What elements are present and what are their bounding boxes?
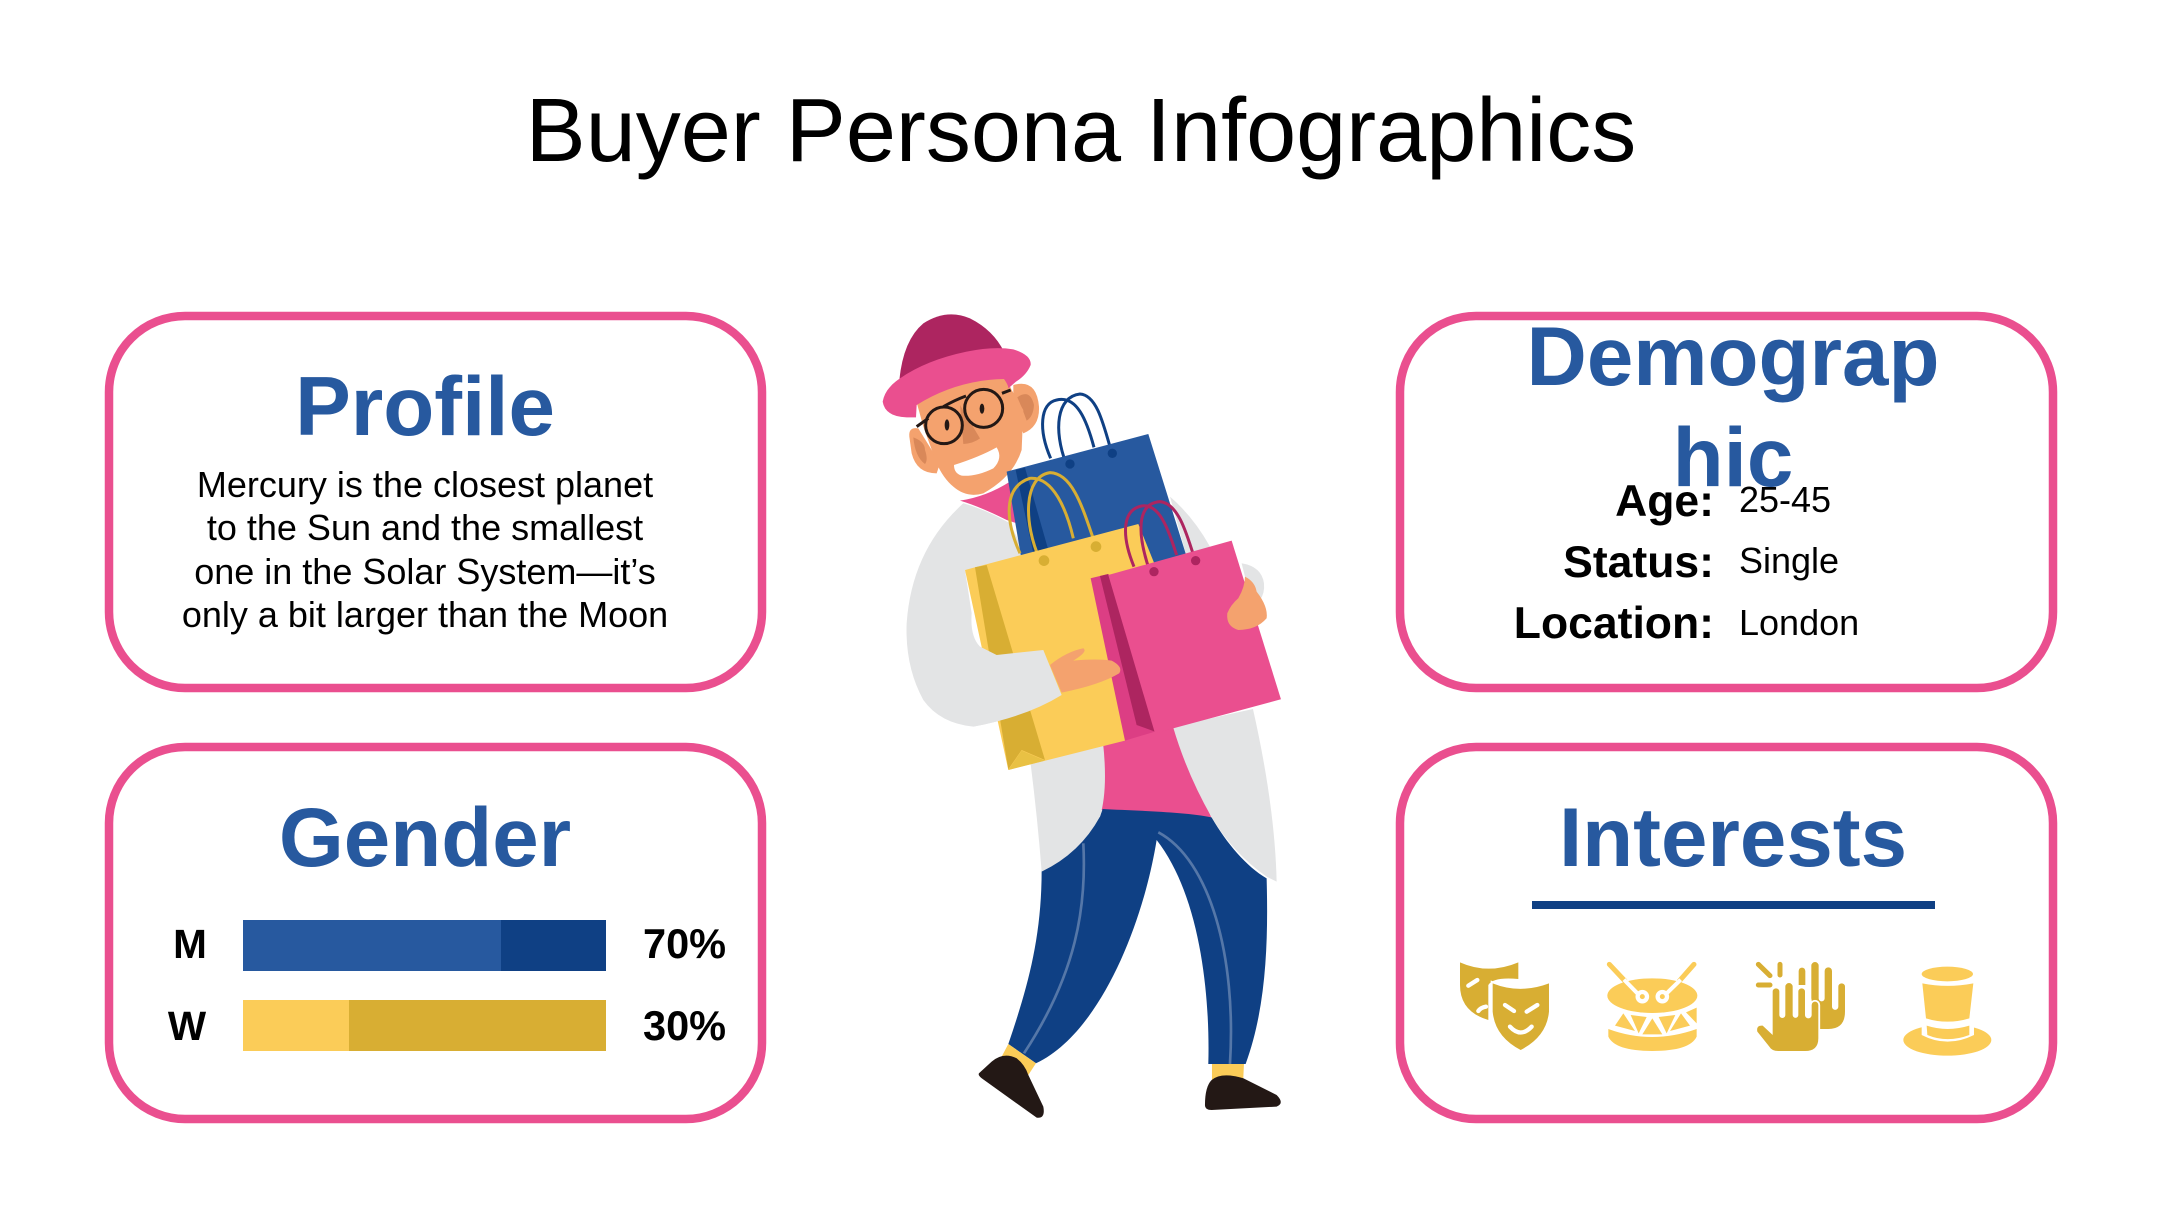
glasses: [917, 389, 1011, 444]
text block: status: [1563, 538, 1839, 587]
bar chart: male 70%: M: [173, 921, 207, 967]
text block: profile description: to the Sun and the smallest: [207, 507, 643, 548]
heading: gender: Gender: [279, 790, 571, 884]
panel: gender: [109, 747, 762, 1119]
text block: location: London: [1739, 602, 1859, 643]
coat lower panels: [1027, 720, 1105, 872]
trousers: [1008, 809, 1267, 1064]
heading: demographic: hic: [1673, 410, 1793, 504]
heading: interests: Interests: [1559, 790, 1907, 884]
icon: theatre masks: [1460, 962, 1549, 1050]
text block: age: 25-45: [1739, 479, 1831, 520]
text block: location: [1514, 599, 1859, 648]
bar chart: women 30%: 30%: [643, 1002, 726, 1049]
blue bag: [1007, 394, 1187, 590]
panel: profile: [109, 316, 762, 688]
text block: status: Status:: [1563, 538, 1714, 587]
illustration: shopper with bags: [883, 314, 1281, 1118]
heading: demographic: Demograp: [1527, 309, 1939, 403]
text block: profile description: [182, 464, 668, 635]
socks: [1002, 1044, 1244, 1080]
text block: status: Single: [1739, 540, 1839, 581]
right hand: [1227, 577, 1267, 630]
left hand: [1050, 648, 1120, 693]
text block: age: Age:: [1615, 477, 1714, 526]
face: [916, 373, 1023, 495]
icon: clapping hands: [1757, 962, 1845, 1051]
heading: demographic: [1527, 309, 1939, 504]
underline: [1532, 901, 1935, 909]
yellow bag: [965, 473, 1155, 770]
bar chart: women 30%: [168, 1000, 726, 1051]
coat sleeve over bag: [950, 643, 1062, 727]
title: Buyer Persona Infographics: [526, 81, 1636, 181]
icon: drum: [1607, 964, 1697, 1051]
shirt torso: [1097, 717, 1212, 818]
panel: interests: [1400, 747, 2053, 1119]
bar chart: male 70%: [173, 920, 726, 971]
panel: demographic: [1400, 309, 2053, 688]
hat: [899, 314, 1004, 380]
lower body: [979, 709, 1281, 1118]
text block: profile description: only a bit larger than the Moon: [182, 594, 668, 635]
text block: profile description: Mercury is the closest planet: [197, 464, 653, 505]
text block: profile description: one in the Solar System—it’s: [194, 551, 656, 592]
coat upper: [907, 503, 1062, 727]
shoes: [979, 1056, 1044, 1118]
heading: profile: Profile: [295, 359, 555, 453]
text block: age: [1615, 477, 1831, 526]
pink bag: [1091, 502, 1281, 741]
icon: top hat: [1903, 967, 1991, 1056]
neck scarf: [960, 482, 1017, 523]
bar chart: male 70%: 70%: [643, 920, 726, 967]
text block: location: Location:: [1514, 599, 1714, 648]
ears: [1013, 384, 1039, 433]
bar chart: women 30%: W: [168, 1003, 207, 1049]
head: [883, 314, 1039, 495]
